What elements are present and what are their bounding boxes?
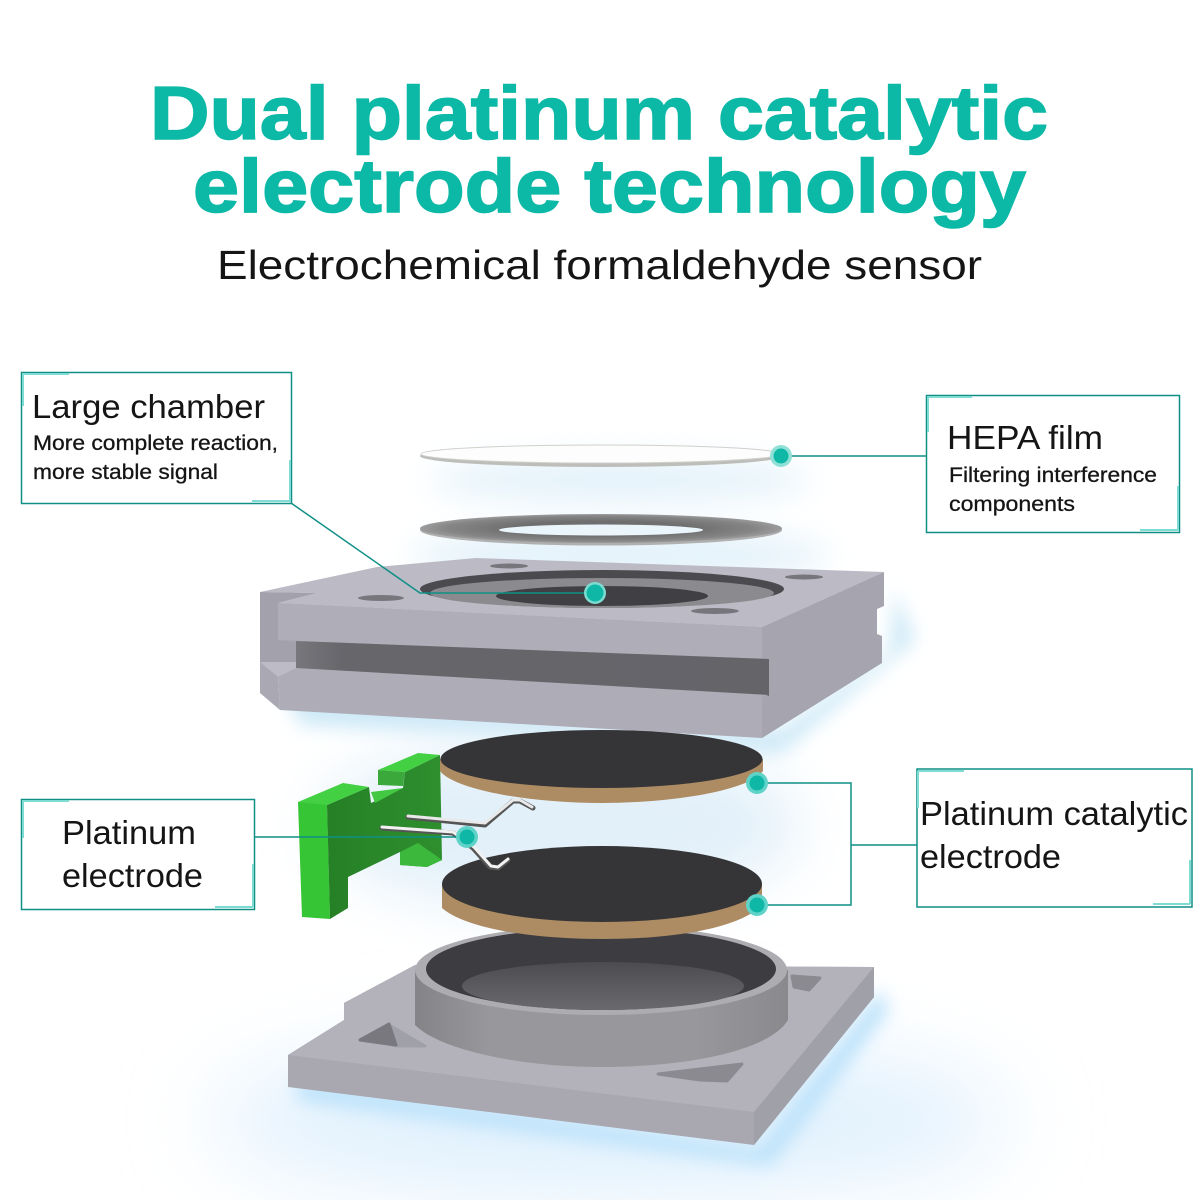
callout: HEPA film: components — [949, 492, 1075, 516]
callout: Platinum electrode: electrode — [62, 858, 203, 895]
part: base with cup — [288, 925, 874, 1145]
title: electrode technology — [193, 144, 1026, 228]
title: Dual platinum catalytic — [150, 71, 1048, 155]
leader: platinum electrode — [254, 836, 467, 838]
callout: Platinum electrode: Platinum — [62, 815, 196, 852]
leader: HEPA film — [781, 455, 926, 457]
background glow — [210, 458, 1010, 1195]
right side — [762, 572, 884, 738]
marker: platinum electrode — [456, 826, 478, 848]
block backing — [260, 592, 769, 700]
callout: Large chamber: More complete reaction, — [33, 431, 278, 455]
marker: upper disc — [746, 772, 768, 794]
callout: Platinum electrode — [22, 800, 254, 910]
marker: lower disc — [746, 894, 768, 916]
screw holes — [490, 564, 528, 568]
callout: HEPA film: HEPA film — [947, 420, 1103, 457]
callout: HEPA film — [926, 396, 1180, 532]
top face — [260, 558, 884, 627]
part: electrode wires — [382, 800, 533, 868]
upper front — [278, 603, 762, 660]
callout: Large chamber: more stable signal — [33, 460, 218, 484]
callout: Platinum catalytic electrode: Platinum catalytic — [920, 796, 1188, 833]
leader: platinum catalytic electrode — [757, 783, 917, 905]
callout: Platinum catalytic electrode — [917, 769, 1192, 907]
lower left step — [260, 662, 296, 710]
title — [150, 71, 1048, 228]
part: large chamber block — [260, 558, 884, 738]
callout: Large chamber: Large chamber — [32, 389, 265, 426]
marker: large chamber — [584, 582, 606, 604]
leader: large chamber — [291, 503, 595, 593]
callout: Platinum catalytic electrode: electrode — [920, 839, 1061, 876]
slot — [296, 641, 769, 696]
cup wall — [415, 970, 788, 1067]
callout: HEPA film: Filtering interference — [949, 463, 1157, 487]
part: green electrode bracket — [298, 753, 442, 919]
part: HEPA film disc — [420, 445, 782, 467]
part: upper catalytic disc — [440, 730, 763, 803]
left recess — [260, 592, 317, 662]
marker: HEPA film — [770, 445, 792, 467]
subtitle: Electrochemical formaldehyde sensor — [217, 242, 982, 288]
lower front — [278, 668, 769, 738]
part: gasket ring — [420, 514, 782, 546]
part: lower catalytic disc — [442, 846, 762, 939]
triangular holes — [360, 976, 820, 1081]
chamber opening — [420, 570, 784, 608]
callout: Large chamber — [22, 372, 292, 504]
